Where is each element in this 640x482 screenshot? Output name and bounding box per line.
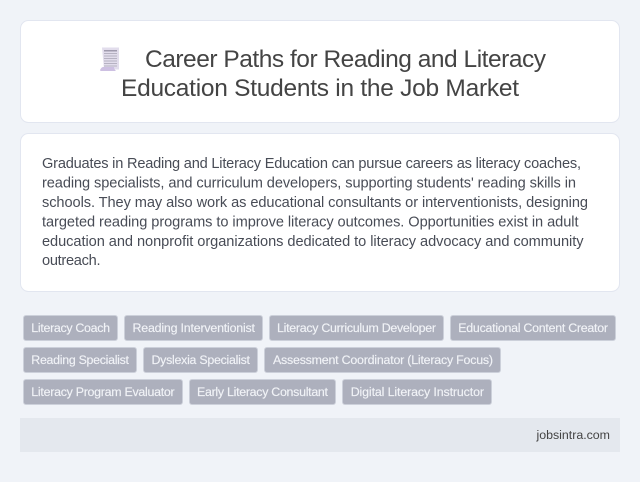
tag: Assessment Coordinator (Literacy Focus): Assessment Coordinator (Literacy Focus) — [273, 353, 493, 367]
description text: Graduates in Reading and Literacy Education can pursue careers as literacy coaches, — [42, 156, 581, 172]
tag: Reading Specialist: Reading Specialist — [31, 353, 130, 367]
title: Career Paths for Reading and Literacy — [145, 46, 547, 73]
description text: schools. They may also work as educational consultants or interventionists, designing — [42, 195, 588, 211]
tag: Reading Interventionist — [124, 316, 262, 340]
tag: Educational Content Creator — [450, 316, 616, 340]
panel: description card — [20, 134, 620, 292]
tag: Dyslexia Specialist — [144, 348, 258, 372]
tag: Assessment Coordinator (Literacy Focus) — [264, 348, 500, 372]
tag: Reading Specialist — [24, 348, 136, 372]
footer bar — [20, 418, 620, 452]
tag: Literacy Curriculum Developer: Literacy Curriculum Developer — [277, 321, 436, 335]
tag: Literacy Coach: Literacy Coach — [31, 321, 110, 335]
title — [121, 46, 547, 102]
tag: Digital Literacy Instructor — [342, 380, 492, 404]
description text: reading specialists, and curriculum developers, supporting students' reading skills in — [42, 176, 576, 192]
tag: Literacy Program Evaluator: Literacy Program Evaluator — [31, 385, 175, 399]
tags: career paths — [24, 316, 616, 404]
description text — [42, 156, 588, 269]
tag: Literacy Program Evaluator — [24, 380, 182, 404]
tag: Literacy Coach — [24, 316, 118, 340]
title: Education Students in the Job Market — [121, 75, 519, 102]
description text: targeted reading programs to improve literacy outcomes. Opportunities exist in adult — [42, 214, 578, 230]
description text: education and nonprofit organizations dedicated to literacy advocacy and community — [42, 234, 584, 250]
tag: Early Literacy Consultant: Early Literacy Consultant — [197, 385, 329, 399]
footer source text: jobsintra.com — [536, 428, 610, 442]
tag: Early Literacy Consultant — [190, 380, 336, 404]
tag: Reading Interventionist: Reading Interventionist — [132, 321, 256, 335]
icon: scroll — [100, 48, 119, 71]
tag: Literacy Curriculum Developer — [270, 316, 444, 340]
description text: outreach. — [42, 253, 100, 269]
tag: Educational Content Creator: Educational Content Creator — [458, 321, 608, 335]
tag: Digital Literacy Instructor: Digital Literacy Instructor — [351, 385, 484, 399]
panel: header card — [20, 20, 620, 122]
tag: Dyslexia Specialist: Dyslexia Specialist — [152, 353, 251, 367]
